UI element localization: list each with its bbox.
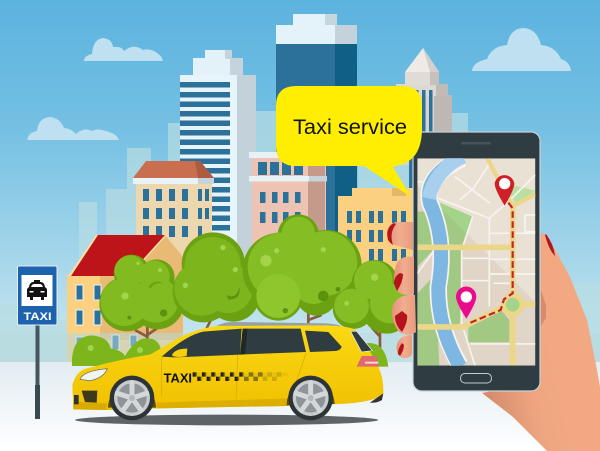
rear bumper bbox=[370, 393, 383, 403]
roundabout bbox=[503, 295, 522, 314]
map roads bbox=[417, 158, 535, 366]
tail light bbox=[357, 356, 379, 367]
tree 1 foliage bbox=[99, 255, 184, 331]
tree 2 foliage bbox=[173, 232, 260, 322]
ground bbox=[0, 362, 600, 451]
mirror bbox=[172, 349, 187, 357]
fingers bbox=[387, 222, 555, 358]
map screen bbox=[417, 157, 535, 367]
door lines bbox=[162, 353, 306, 402]
taxi car bbox=[72, 322, 383, 425]
map shaded diagonal bbox=[417, 185, 535, 366]
map streets bbox=[417, 163, 535, 366]
sign pole bbox=[36, 324, 40, 419]
map green areas bbox=[417, 185, 535, 366]
lower sill bbox=[157, 398, 293, 408]
checker stripe bbox=[193, 372, 288, 381]
tree 3 foliage bbox=[243, 214, 362, 321]
little finger bbox=[397, 335, 412, 358]
horizon strip bbox=[0, 333, 600, 362]
route dashes bbox=[467, 203, 513, 324]
rear window bbox=[351, 331, 372, 352]
building: house with red roof bbox=[67, 235, 183, 362]
bubble label: Taxi service bbox=[293, 116, 407, 139]
middle finger bbox=[394, 257, 414, 295]
hand palm and thumb bbox=[482, 234, 600, 451]
rear wheel bbox=[287, 376, 335, 420]
speaker bbox=[461, 142, 491, 144]
pin: red destination bbox=[495, 175, 514, 206]
sign plate bbox=[18, 266, 57, 325]
pin: magenta origin bbox=[456, 286, 476, 319]
tower: dark blue skyscraper bbox=[276, 14, 357, 259]
car lettering: TAXI bbox=[164, 371, 192, 385]
icon: car front bbox=[27, 280, 47, 300]
taxi stop sign bbox=[18, 266, 57, 419]
smartphone bbox=[413, 132, 540, 391]
headlight bbox=[80, 369, 107, 381]
phone body bbox=[413, 132, 540, 391]
tower: grey pointed skyscraper bbox=[392, 48, 452, 190]
clouds bbox=[27, 28, 571, 140]
index finger bbox=[387, 222, 413, 250]
trees and bushes bbox=[72, 214, 412, 367]
front grille bbox=[82, 391, 97, 403]
roof rail bbox=[217, 322, 343, 327]
thumb nail bbox=[545, 234, 555, 256]
front windscreen and side windows bbox=[162, 329, 342, 357]
tree 4 foliage bbox=[333, 260, 412, 334]
building: yellow right bbox=[338, 188, 414, 316]
building: pink bbox=[249, 152, 327, 267]
tree trunks bbox=[135, 313, 380, 348]
front wheel bbox=[108, 376, 156, 420]
ring finger bbox=[392, 295, 416, 335]
sign label: TAXI bbox=[24, 311, 52, 323]
speech bubble bbox=[276, 86, 422, 197]
car body bbox=[72, 325, 383, 410]
bushes bbox=[72, 335, 388, 367]
building: beige with terracotta roof bbox=[133, 161, 214, 264]
tower: white striped skyscraper bbox=[180, 50, 256, 265]
car shadow bbox=[75, 415, 378, 425]
map river bbox=[429, 158, 463, 366]
home button bbox=[460, 374, 492, 383]
pale background skyline bbox=[0, 111, 600, 363]
